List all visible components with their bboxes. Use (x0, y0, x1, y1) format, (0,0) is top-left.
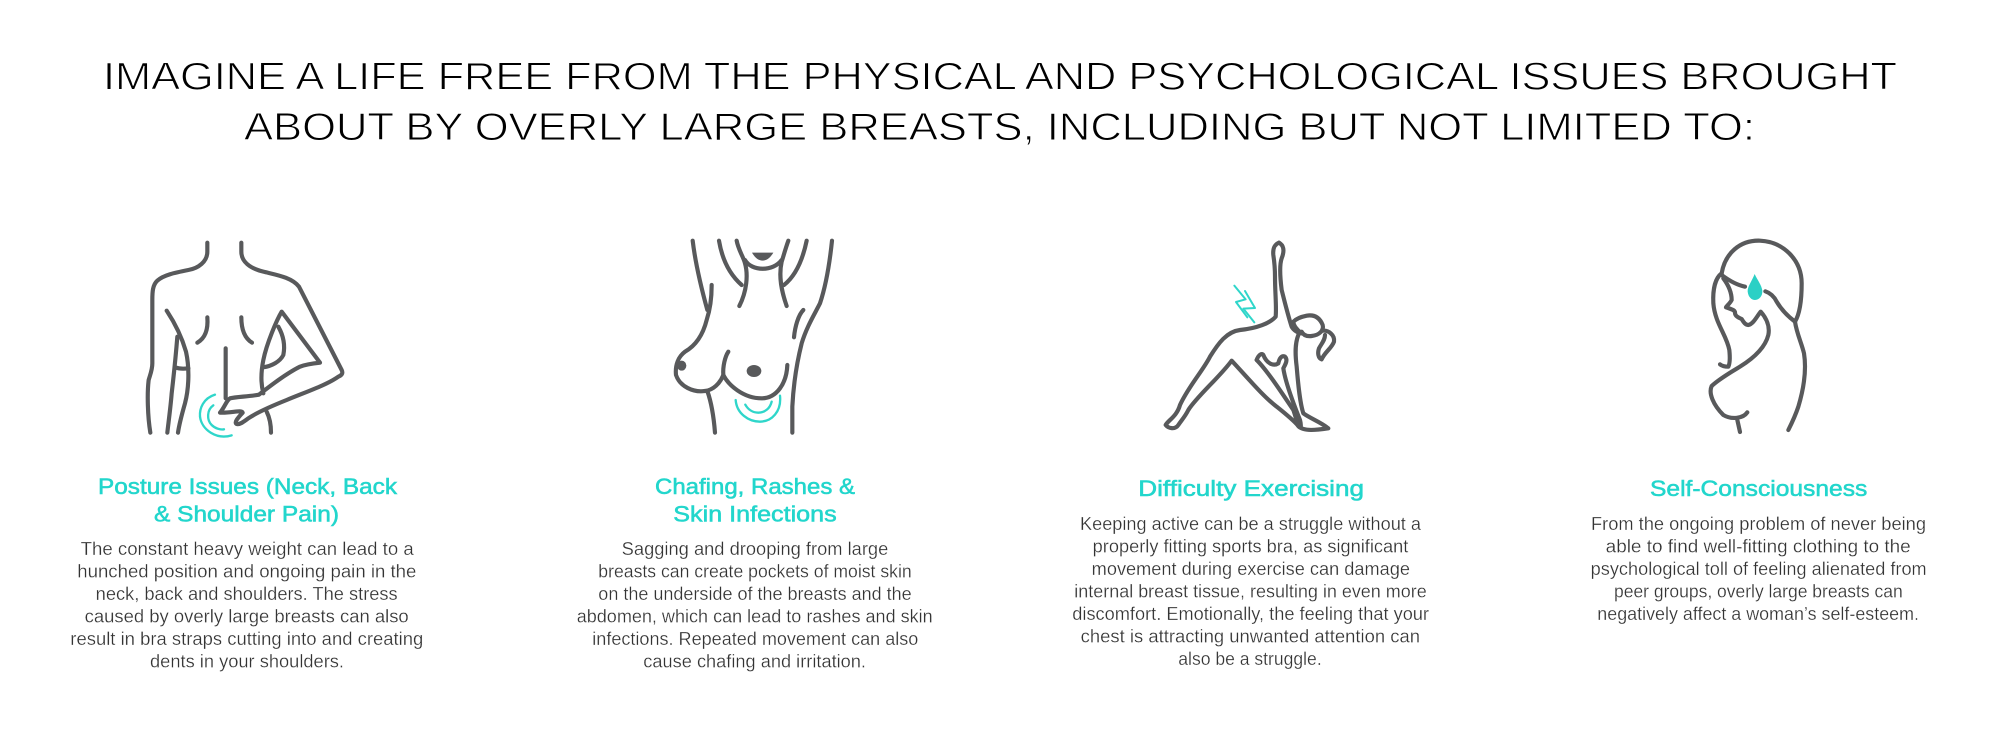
text block: posture issues: neck, back and shoulders. The stress (96, 584, 398, 604)
text block: posture issues: dents in your shoulders. (150, 651, 344, 671)
text block: self-consciousness: From the ongoing problem of never being (1591, 514, 1926, 534)
heading: posture issues: Posture Issues (Neck, Back (98, 474, 398, 499)
icon: torso with arms raised (676, 241, 832, 433)
text block: difficulty exercising: chest is attracting unwanted attention can (1081, 626, 1420, 646)
panel: posture issues (70, 243, 423, 671)
text block: self-consciousness: psychological toll of feeling alienated from (1591, 559, 1927, 579)
text block: posture issues: caused by overly large breasts can also (85, 606, 409, 626)
text block: self-consciousness: peer groups, overly large breasts can (1614, 581, 1903, 601)
icon: torso with hand on back (148, 243, 342, 436)
heading: chafing: Skin Infections (673, 502, 837, 527)
text block: chafing: Sagging and drooping from large (622, 539, 888, 559)
text block: posture issues (70, 539, 423, 671)
text block: chafing (577, 539, 933, 671)
text block: self-consciousness: able to find well-fitting clothing to the (1606, 536, 1911, 556)
panel: difficulty exercising (1072, 243, 1429, 669)
text block: difficulty exercising: Keeping active can be a struggle without a (1080, 514, 1422, 534)
icon: woman in yoga triangle pose (1166, 243, 1334, 430)
text block: difficulty exercising: properly fitting sports bra, as significant (1093, 536, 1408, 556)
text block: posture issues: hunched position and ongoing pain in the (77, 561, 416, 581)
text block: self-consciousness (1591, 514, 1927, 624)
heading: difficulty exercising: Difficulty Exercising (1138, 476, 1364, 501)
panel: self-consciousness (1591, 241, 1927, 624)
text block: difficulty exercising: discomfort. Emotionally, the feeling that your (1072, 604, 1429, 624)
text block: self-consciousness: negatively affect a woman’s self-esteem. (1597, 604, 1919, 624)
heading: posture issues (98, 474, 398, 527)
text block: posture issues: result in bra straps cutting into and creating (70, 629, 423, 649)
text block: chafing: cause chafing and irritation. (643, 651, 866, 671)
text block: chafing: breasts can create pockets of moist skin (598, 561, 912, 581)
text block: difficulty exercising (1072, 514, 1429, 669)
title (103, 56, 1897, 149)
text block: difficulty exercising: also be a struggle. (1178, 649, 1322, 669)
heading: self-consciousness: Self-Consciousness (1650, 476, 1867, 501)
title: IMAGINE A LIFE FREE FROM THE PHYSICAL AND PSYCHOLOGICAL ISSUES BROUGHT (103, 56, 1897, 98)
icon: woman in profile with teardrop (1711, 241, 1805, 432)
heading: posture issues: & Shoulder Pain) (154, 502, 339, 527)
panel: chafing, rashes and skin infections (577, 241, 933, 671)
text block: chafing: abdomen, which can lead to rashes and skin (577, 606, 933, 626)
text block: difficulty exercising: internal breast tissue, resulting in even more (1074, 581, 1427, 601)
heading: chafing (655, 474, 855, 527)
text block: chafing: on the underside of the breasts and the (598, 584, 912, 604)
title: ABOUT BY OVERLY LARGE BREASTS, INCLUDING BUT NOT LIMITED TO: (244, 106, 1755, 149)
text block: chafing: infections. Repeated movement can also (592, 629, 918, 649)
text block: posture issues: The constant heavy weight can lead to a (81, 539, 415, 559)
text block: difficulty exercising: movement during exercise can damage (1092, 559, 1410, 579)
heading: chafing: Chafing, Rashes & (655, 474, 855, 499)
